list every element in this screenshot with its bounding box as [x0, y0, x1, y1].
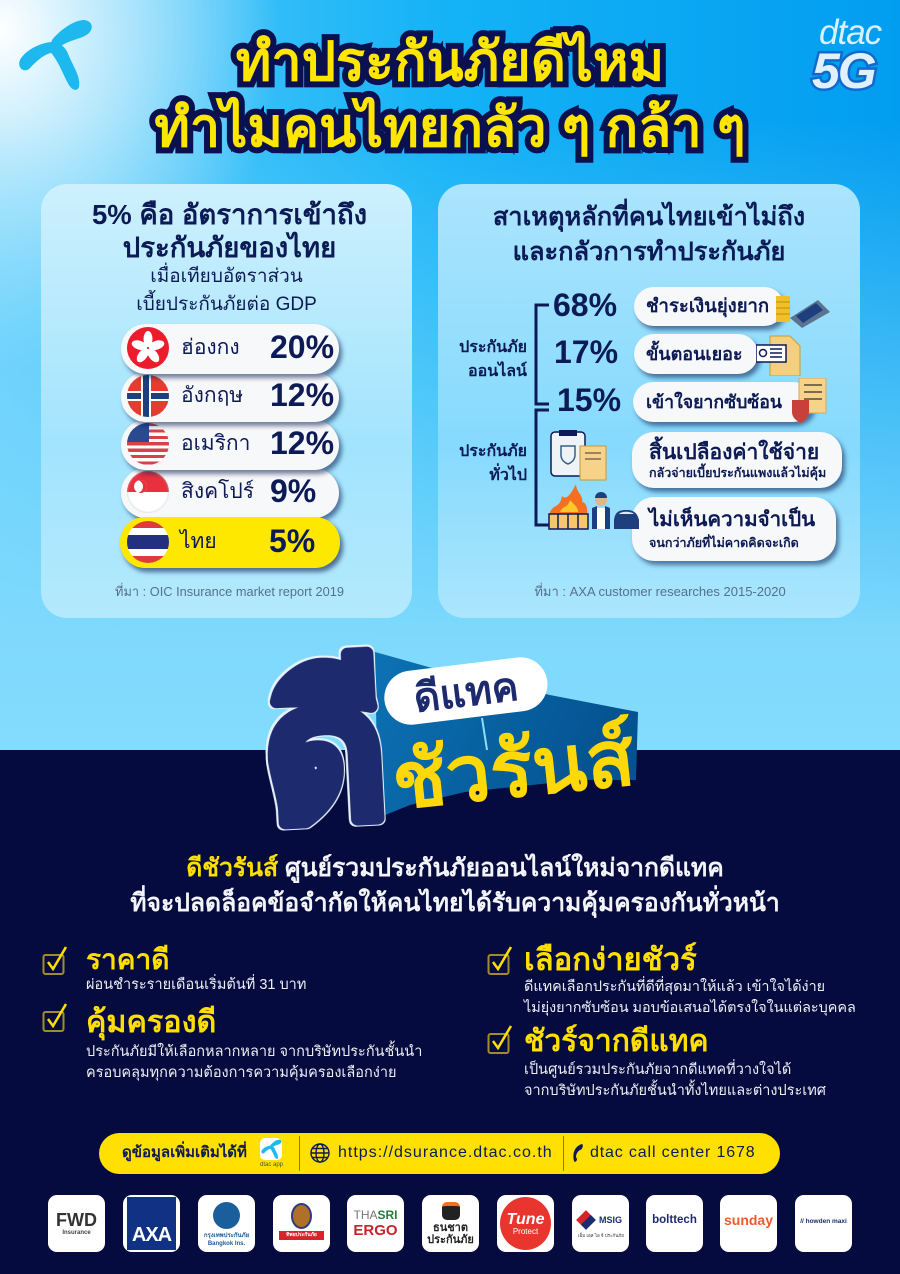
benefit: good coverage	[42, 1003, 422, 1081]
intro text: ที่จะปลดล็อคข้อจำกัดให้คนไทยได้รับความคุ้มครองกันทั่วหน้า	[130, 890, 780, 917]
source note: ที่มา : AXA customer researches 2015-2020	[534, 584, 786, 599]
panel: Thailand insurance access rate	[41, 184, 412, 618]
icon: checklist with shield	[792, 378, 826, 423]
label: general insurance: ประกันภัย	[459, 443, 527, 460]
logo: sunday	[720, 1195, 777, 1252]
logo: dtac 5G	[810, 13, 882, 99]
logo: Thaisri Ergo	[347, 1195, 404, 1252]
contact bar: dtac app	[260, 1162, 283, 1168]
reason: cost	[632, 432, 842, 488]
panel heading: ประกันภัยของไทย	[123, 232, 336, 263]
logo: Bangkok Insurance	[198, 1195, 255, 1252]
reason: many steps: ขั้นตอนเยอะ	[646, 344, 743, 364]
label: online insurance	[459, 339, 527, 380]
contact bar: https://dsurance.dtac.co.th	[338, 1144, 553, 1161]
label: general insurance: ทั่วไป	[489, 467, 527, 484]
row: Hong Kong	[121, 324, 339, 374]
panel heading	[493, 198, 805, 266]
icon: check	[42, 946, 67, 975]
source note: ที่มา : OIC Insurance market report 2019	[115, 584, 344, 599]
benefit: easy choice	[488, 942, 856, 1016]
panel heading	[92, 199, 367, 263]
bracket lines	[534, 304, 549, 526]
row: UK: อังกฤษ	[181, 384, 243, 407]
logo surance word: ชัวรันส์	[388, 712, 639, 826]
benefit: good coverage: ครอบคลุมทุกความต้องการความคุ้มครองเลือกง่าย	[86, 1065, 396, 1081]
row: Thailand highlighted: ไทย	[180, 530, 217, 553]
logo: AXA: AXA	[132, 1224, 171, 1246]
panel heading: 5% คือ อัตราการเข้าถึง	[92, 199, 367, 230]
row: USA	[121, 420, 339, 470]
logo: howden maxi	[795, 1195, 852, 1252]
icon: check	[488, 1025, 512, 1054]
icon: documents	[756, 336, 800, 376]
logo: Bangkok Insurance: กรุงเทพประกันภัย	[204, 1233, 249, 1239]
reason: no necessity: ไม่เห็นความจำเป็น	[649, 508, 815, 531]
reason: no necessity: จนกว่าภัยที่ไม่คาดคิดจะเกิด	[649, 536, 799, 550]
icon: check	[488, 946, 512, 975]
logo: Dhipaya: ทิพยประกันภัย	[286, 1232, 317, 1238]
stat 68%: 68%	[553, 287, 617, 323]
reason: no necessity	[632, 497, 836, 561]
icon: globe	[310, 1143, 330, 1163]
icon: coins and cards	[776, 296, 830, 328]
benefit: sure from dtac	[488, 1024, 826, 1099]
reason: payment: ชำระเงินยุ่งยาก	[646, 295, 769, 316]
reason: cost: กลัวจ่ายเบี้ยประกันแพงแล้วไม่คุ้ม	[649, 466, 826, 480]
benefit: good price: ผ่อนชำระรายเดือนเริ่มต้นที่ 31 บาท	[86, 977, 306, 993]
row: UK: 12%	[270, 377, 334, 413]
logo: dtac 5G: dtac	[819, 13, 881, 52]
row: Hong Kong: 20%	[270, 329, 334, 365]
icon: burning house, agent and car	[548, 484, 639, 530]
icon: phone	[573, 1144, 583, 1162]
row: Singapore	[121, 468, 339, 518]
panel heading: และกลัวการทำประกันภัย	[513, 238, 785, 266]
benefit: good price: ราคาดี	[86, 944, 169, 975]
contact bar: dtac call center 1678	[590, 1144, 756, 1161]
panel subheading: เบี้ยประกันภัยต่อ GDP	[136, 294, 317, 315]
row: Singapore: สิงคโปร์	[181, 480, 254, 503]
logo white pill	[381, 654, 551, 728]
panel heading: สาเหตุหลักที่คนไทยเข้าไม่ถึง	[493, 203, 805, 231]
row: Hong Kong: ฮ่องกง	[181, 336, 240, 359]
stat 17%: 17%	[554, 334, 618, 370]
row: Thailand highlighted: 5%	[269, 523, 315, 559]
benefit: sure from dtac: จากบริษัทประกันภัยชั้นนำทั้งไทยและต่างประเทศ	[524, 1083, 826, 1099]
logo: bolttech	[646, 1195, 703, 1252]
logo: Bangkok Insurance: Bangkok Ins.	[208, 1241, 245, 1247]
row: USA: 12%	[270, 425, 334, 461]
intro text: ดีชัวรันส์ ศูนย์รวมประกันภัยออนไลน์ใหม่จากดีแทค	[186, 855, 724, 882]
partner logos	[48, 1195, 852, 1252]
logo: Thanachart: ธนชาต	[433, 1222, 468, 1234]
benefit: sure from dtac: ชัวร์จากดีแทค	[524, 1025, 709, 1058]
reason: complicated	[633, 382, 813, 422]
logo: Tune Protect: Tune	[507, 1211, 544, 1228]
logo: Thanachart	[422, 1195, 479, 1252]
panel: main reasons	[438, 184, 860, 618]
stat 15%: 15%	[557, 382, 621, 418]
logo: FWD: FWD	[56, 1210, 97, 1230]
row: UK	[121, 372, 339, 422]
reason: complicated: เข้าใจยากซับซ้อน	[646, 392, 782, 412]
panel subheading: เมื่อเทียบอัตราส่วน	[150, 266, 303, 287]
reason: many steps	[634, 334, 758, 374]
benefit: easy choice: เลือกง่ายชัวร์	[524, 942, 697, 977]
logo dtac word: ดีแทค	[411, 665, 521, 721]
logo: dtac mark	[19, 20, 92, 90]
icon: dtac app	[260, 1138, 282, 1160]
label: online insurance: ประกันภัย	[459, 339, 527, 356]
benefit: easy choice: ไม่ยุ่งยากซับซ้อน มอบข้อเสนอได้ตรงใจในแต่ละบุคคล	[524, 1000, 856, 1016]
row: USA: อเมริกา	[181, 432, 250, 455]
benefit: good price	[42, 944, 306, 993]
panel subheading	[136, 262, 317, 315]
title: ทำไมคนไทยกลัว ๆ กล้า ๆ	[154, 98, 746, 158]
logo: Dhipaya	[273, 1195, 330, 1252]
logo: Tune Protect	[497, 1195, 554, 1252]
logo: MSIG: MSIG	[599, 1215, 622, 1225]
logo: Thaisri Ergo: THASRI	[353, 1208, 398, 1222]
logo: MSIG	[572, 1195, 629, 1252]
label: online insurance: ออนไลน์	[468, 363, 527, 380]
label: general insurance	[459, 443, 527, 484]
icon: clipboard and receipt	[550, 430, 606, 480]
icon: check	[42, 1003, 67, 1032]
row: Thailand highlighted	[120, 517, 340, 568]
logo: howden maxi: // howden maxi	[800, 1218, 847, 1225]
background navy band	[0, 750, 900, 1274]
logo: FWD: Insurance	[62, 1230, 91, 1236]
row: Singapore: 9%	[270, 473, 316, 509]
logo: dtac 5G: 5G	[812, 43, 875, 99]
contact bar: ดูข้อมูลเพิ่มเติมได้ที่	[122, 1144, 247, 1161]
logo: Thaisri Ergo: ERGO	[353, 1222, 398, 1239]
benefit: good coverage: คุ้มครองดี	[86, 1005, 216, 1039]
reason: cost: สิ้นเปลืองค่าใช้จ่าย	[649, 441, 819, 464]
benefit: sure from dtac: เป็นศูนย์รวมประกันภัยจากดีแทคที่วางใจได้	[524, 1062, 791, 1078]
benefit: easy choice: ดีแทคเลือกประกันที่ดีที่สุดมาให้แล้ว เข้าใจได้ง่าย	[524, 979, 825, 995]
reason: payment	[634, 287, 784, 326]
logo: bolttech: bolttech	[652, 1214, 697, 1226]
logo: sunday: sunday	[724, 1212, 773, 1228]
logo: Thanachart: ประกันภัย	[427, 1234, 474, 1246]
title: ทำประกันภัยดีไหม	[236, 32, 664, 92]
logo: Tune Protect: Protect	[513, 1227, 538, 1236]
title	[149, 24, 748, 163]
logo: AXA	[123, 1195, 180, 1252]
background sky	[0, 0, 900, 752]
contact bar	[99, 1133, 780, 1174]
logo: MSIG: เอ็ม เอส ไอ จี ประกันภัย	[578, 1233, 624, 1238]
logo: D-Surance	[259, 644, 639, 840]
logo rays	[375, 652, 638, 818]
logo: FWD	[48, 1195, 105, 1252]
intro text	[130, 853, 780, 918]
benefit: good coverage: ประกันภัยมีให้เลือกหลากหลาย จากบริษัทประกันชั้นนำ	[86, 1044, 422, 1060]
